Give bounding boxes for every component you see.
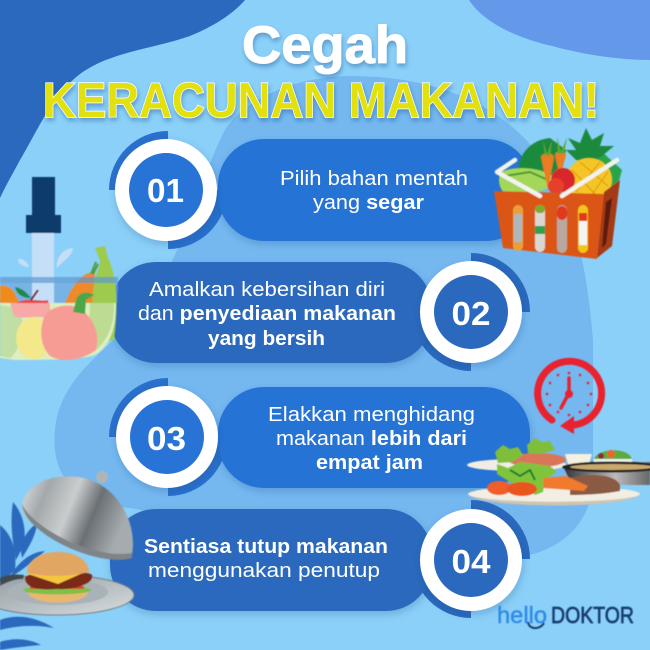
tomato and apple <box>551 168 575 192</box>
burger <box>23 552 92 602</box>
basket side <box>597 180 620 258</box>
pineapple crown <box>566 128 614 163</box>
step 2 text <box>138 279 396 350</box>
icon: clock with arrow <box>538 361 602 434</box>
step 2 text: Amalkan kebersihan diri <box>149 279 385 301</box>
carrot <box>65 272 95 305</box>
basket front <box>494 191 604 259</box>
step 3 text: makanan lebih dari <box>276 428 467 450</box>
logo: helloDOKTOR: DOKTOR <box>551 602 634 628</box>
prawn <box>543 476 588 491</box>
step 4 pill <box>110 509 432 611</box>
tray <box>0 575 134 615</box>
step 1 <box>109 131 532 249</box>
step 2 <box>110 253 530 371</box>
orange <box>0 286 19 303</box>
icon: cloche and burger <box>0 471 134 615</box>
step 2 text: dan penyediaan makanan <box>138 303 396 325</box>
title line 2: KERACUNAN MAKANAN! <box>43 74 599 128</box>
front plate <box>468 486 640 502</box>
step 2 text: yang bersih <box>208 328 325 350</box>
step 1 badge: 01 <box>147 172 184 209</box>
bowl rim <box>0 277 118 283</box>
logo: helloDOKTOR: hello <box>497 602 547 628</box>
title line 1: Cegah <box>242 16 408 75</box>
icon: faucet and bowl of washed produce <box>0 177 118 360</box>
step 4 text <box>144 536 388 582</box>
grilled meat <box>508 453 566 467</box>
step 2 quarter arcs <box>412 253 530 371</box>
carrots <box>541 153 554 190</box>
icon: palm leaf <box>0 502 54 650</box>
icon: shopping basket of vegetables <box>494 128 622 259</box>
step 4 badge: 04 <box>452 543 491 580</box>
step 2 badge <box>420 261 522 363</box>
lettuce <box>499 168 555 194</box>
icon: plates of food <box>467 438 650 506</box>
pineapple <box>566 158 612 202</box>
bell pepper <box>41 306 97 360</box>
step 1 text: yang segar <box>313 192 424 214</box>
dark greens <box>518 138 566 190</box>
back lettuce <box>495 445 523 463</box>
step 4 text: Sentiasa tutup makanan <box>144 536 388 558</box>
apple <box>17 300 50 318</box>
step 1 pill <box>218 139 532 241</box>
step 2 pill <box>110 262 432 363</box>
logo: helloDOKTOR <box>497 602 634 628</box>
step 4 text: menggunakan penutup <box>148 560 380 582</box>
dome knob <box>96 471 108 483</box>
step 3 text: empat jam <box>316 452 423 474</box>
background blob: centre <box>54 76 593 556</box>
background blob: top right <box>469 0 650 60</box>
water stream <box>32 233 54 303</box>
step 3 badge <box>116 386 218 488</box>
title <box>43 16 599 128</box>
step 1 text: Pilih bahan mentah <box>280 168 468 190</box>
steak <box>570 475 620 495</box>
step 3 text <box>268 404 475 474</box>
salmon slices <box>487 481 511 495</box>
step 3 badge: 03 <box>147 420 186 457</box>
step 4 quarter arcs <box>412 500 530 618</box>
basket handles <box>497 160 617 196</box>
step 4 badge <box>420 509 522 611</box>
faucet <box>26 177 61 233</box>
step 1 badge <box>115 139 217 241</box>
background blob: top left <box>0 0 245 198</box>
step 3 pill <box>218 387 530 488</box>
pan <box>563 462 650 485</box>
salad <box>594 450 632 460</box>
bowl tint <box>0 283 118 303</box>
zucchini <box>80 246 116 345</box>
back plate <box>467 459 567 471</box>
sauce bowl <box>565 454 592 464</box>
step 3 quarter arcs <box>109 378 227 496</box>
basket windows <box>513 205 588 253</box>
bowl contents <box>0 303 116 360</box>
step 3 text: Elakkan menghidang <box>268 404 475 426</box>
dome <box>22 476 133 557</box>
step 3 <box>109 378 530 496</box>
step 4 <box>110 500 530 618</box>
lettuce <box>497 462 557 495</box>
step 1 text <box>280 168 468 214</box>
step 1 quarter arcs <box>109 131 227 249</box>
step 2 badge: 02 <box>452 295 490 332</box>
